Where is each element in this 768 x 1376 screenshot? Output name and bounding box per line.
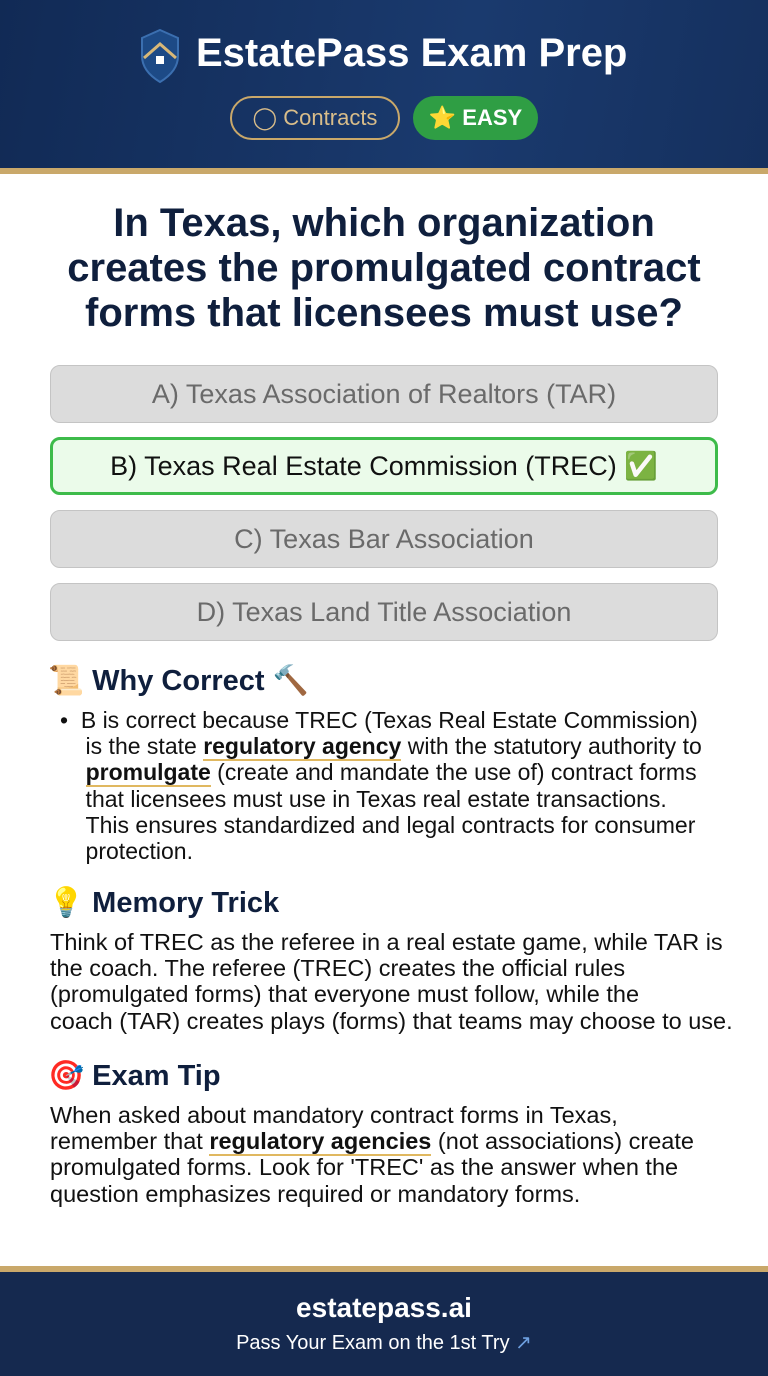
option B correct: B) Texas Real Estate Commission (TREC) ✅ <box>110 451 658 481</box>
heading: memory trick: 💡 Memory Trick <box>48 887 279 919</box>
text: memory trick: (promulgated forms) that everyone must follow, while the <box>50 981 639 1007</box>
question: In Texas, which organization <box>113 201 655 245</box>
text: why correct <box>60 707 702 864</box>
footer site: estatepass.ai <box>296 1292 472 1323</box>
option A <box>50 365 718 423</box>
text: memory trick: Think of TREC as the referee in a real estate game, while TAR is <box>50 929 723 955</box>
tag: easy <box>413 96 538 140</box>
text: exam tip: When asked about mandatory contract forms in Texas, <box>50 1102 618 1128</box>
option C: C) Texas Bar Association <box>234 524 534 554</box>
header band <box>0 0 768 168</box>
option D <box>50 583 718 641</box>
tag: contracts <box>230 96 400 140</box>
text: memory trick: coach (TAR) creates plays (forms) that teams may choose to use. <box>50 1008 733 1034</box>
option A: A) Texas Association of Realtors (TAR) <box>152 378 616 408</box>
footer <box>0 1272 768 1376</box>
title: EstatePass Exam Prep <box>196 31 627 75</box>
heading: why correct: 📜 Why Correct 🔨 <box>48 665 309 697</box>
question <box>67 201 701 335</box>
text: exam tip <box>50 1102 694 1207</box>
footer tagline: Pass Your Exam on the 1st Try ↗ <box>236 1332 532 1354</box>
text: memory trick <box>50 929 733 1034</box>
text: why correct: is the state regulatory agency with the statutory authority to <box>86 733 702 759</box>
text: memory trick: the coach. The referee (TREC) creates the official rules <box>50 955 625 981</box>
question: creates the promulgated contract <box>67 246 701 290</box>
text: exam tip: promulgated forms. Look for 'TREC' as the answer when the <box>50 1154 678 1180</box>
option D: D) Texas Land Title Association <box>197 596 571 626</box>
heading: exam tip: 🎯 Exam Tip <box>48 1060 221 1092</box>
tag: easy: ⭐ EASY <box>429 105 522 130</box>
text: exam tip: remember that regulatory agencies (not associations) create <box>50 1128 694 1154</box>
question: forms that licensees must use? <box>85 291 683 335</box>
logo icon: shield house <box>141 29 179 83</box>
tag: contracts: ◯ Contracts <box>253 105 377 130</box>
text: exam tip: question emphasizes required or mandatory forms. <box>50 1181 580 1207</box>
text: why correct: protection. <box>86 838 193 864</box>
text: why correct: This ensures standardized and legal contracts for consumer <box>86 812 695 838</box>
option B correct <box>50 437 718 495</box>
text: why correct: promulgate (create and mandate the use of) contract forms <box>86 759 697 785</box>
text: why correct: • B is correct because TREC (Texas Real Estate Commission) <box>60 707 698 733</box>
text: why correct: that licensees must use in Texas real estate transactions. <box>86 786 667 812</box>
option C <box>50 510 718 568</box>
